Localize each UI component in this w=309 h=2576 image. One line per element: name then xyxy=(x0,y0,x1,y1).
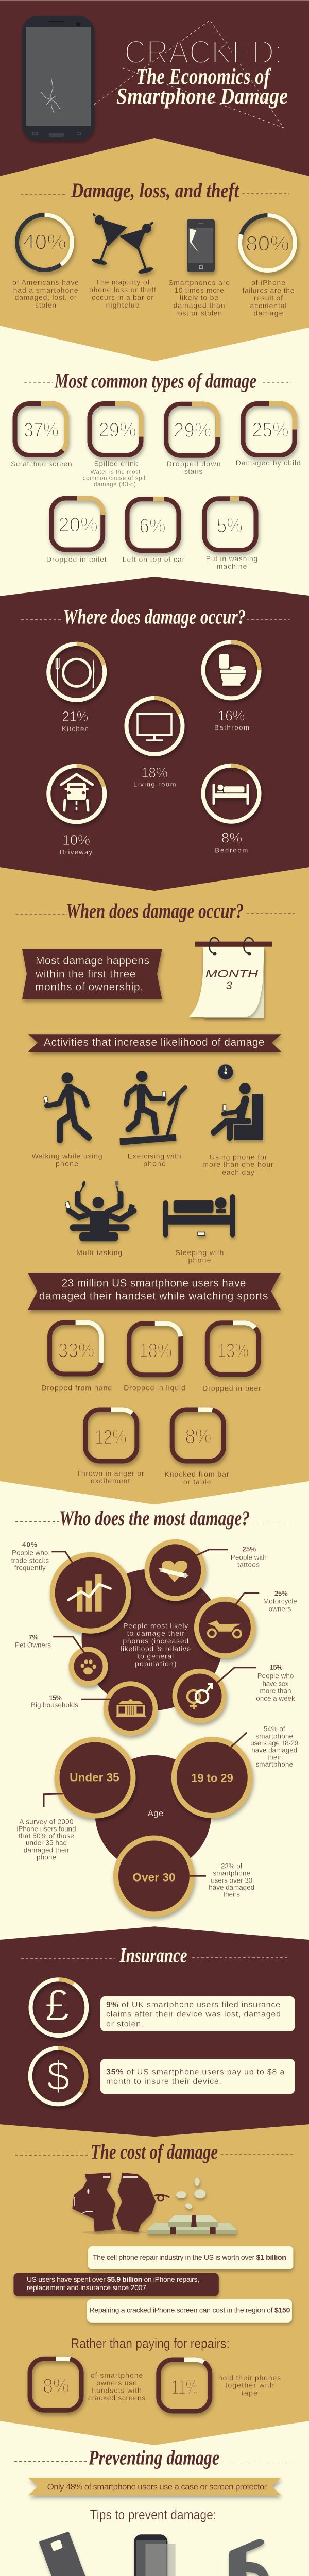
tile: knocked from bar xyxy=(172,1410,224,1461)
text: iPhone failures stat xyxy=(242,279,295,317)
stat: frequent sex: once a week xyxy=(256,1694,295,1702)
labels: activities first row: Exercising with xyxy=(128,1151,181,1160)
stat: motorcycle: owners xyxy=(269,1605,291,1613)
text: survey stat: damaged their xyxy=(24,1846,70,1854)
tile: thrown in anger xyxy=(85,1410,137,1461)
badge: over 30: Over 30 xyxy=(132,1871,176,1884)
icon: screen protector on phone xyxy=(134,2534,176,2576)
panel: header xyxy=(0,0,309,176)
labels: activities first row xyxy=(32,1151,273,1176)
icon: calendar month 3: 3 xyxy=(226,980,232,992)
labels: activities first row: phone xyxy=(143,1159,166,1167)
labels: first row: Damaged by child xyxy=(236,459,301,467)
text: survey stat: iPhone users found xyxy=(16,1825,76,1833)
ring: bedroom xyxy=(203,766,260,822)
callout lines xyxy=(52,1550,259,1699)
text: central likelihood statement: population) xyxy=(135,1659,176,1668)
subheading: tips: Tips to prevent damage: xyxy=(90,2507,216,2522)
stat: pet owners: Pet Owners xyxy=(15,1641,51,1649)
labels: sports second row: Thrown in anger or xyxy=(76,1469,144,1477)
tile: scratched screen xyxy=(15,404,66,455)
stat: frequent sex xyxy=(256,1664,295,1702)
callout: cracked screen cost: Repairing a cracked iPhone screen can cost in the region of $150 xyxy=(89,2306,290,2314)
text: nightclub stat: nightclub xyxy=(106,301,140,309)
text: americans stat: of Americans have xyxy=(12,278,79,286)
ring: kitchen xyxy=(48,644,105,700)
text: over 30 stat: have damaged xyxy=(209,1884,254,1891)
labels: activities first row: more than one hour xyxy=(202,1160,273,1168)
tile: cracked screen users xyxy=(30,2359,81,2410)
badge: tattoos xyxy=(147,1541,203,1598)
labels: sports second row: or table xyxy=(183,1478,211,1486)
labels: first row: Dropped down xyxy=(167,460,220,468)
icon: broken piggy bank xyxy=(72,2173,169,2234)
icon: dripping faucet xyxy=(227,2539,269,2576)
ring: pound: £ xyxy=(45,1981,70,2030)
callout: UK insurance: claims after their device was lost, damaged xyxy=(106,2010,281,2019)
chart: age circles xyxy=(57,1739,250,1914)
ring: 80%: 80% xyxy=(246,232,289,256)
text: central likelihood statement: to damage their xyxy=(127,1629,184,1637)
text: cracked screen users: of smartphone xyxy=(91,2371,143,2379)
tile: dropped in liquid: 18% xyxy=(139,1340,172,1362)
text: over 30 stat: 23% of xyxy=(221,1862,243,1870)
labels: first row: Scratched screen xyxy=(11,460,72,468)
tile: washing machine xyxy=(204,499,256,550)
stat: frequent sex: 15% xyxy=(270,1664,283,1671)
icon: person on treadmill xyxy=(120,1071,185,1145)
text: tape users: together with xyxy=(225,2381,274,2389)
labels: sports second row xyxy=(76,1469,229,1486)
tile: spilled drink: 29% xyxy=(98,419,136,441)
text: ten times stat: 10 times more xyxy=(174,286,224,294)
heading: Damage, loss, and theft xyxy=(71,179,240,202)
labels: second row: Put in washing xyxy=(206,554,258,563)
central circle xyxy=(81,1569,224,1710)
stat: motorcycle: 25% xyxy=(274,1589,288,1597)
stat: big households: 15% xyxy=(49,1694,62,1702)
tile: dropped in toilet xyxy=(52,498,103,550)
badge: stock traders xyxy=(53,1555,129,1631)
labels: activities second row: Multi-tasking xyxy=(76,1248,122,1257)
banner: first three months: within the first three xyxy=(35,968,135,980)
stat: living room: 18% xyxy=(141,765,168,781)
panel: preventing damage xyxy=(14,2446,297,2576)
ring: dollar: $ xyxy=(47,2053,70,2099)
badge: under 35 xyxy=(57,1739,133,1816)
callout: UK insurance: or stolen. xyxy=(106,2020,143,2028)
banner: 23 million xyxy=(28,1273,281,1310)
stat: bedroom: 8% xyxy=(221,830,242,846)
stat: bathroom: 16% xyxy=(218,708,245,724)
text: over 30 stat: theirs xyxy=(223,1891,240,1899)
stat: bedroom xyxy=(215,830,248,854)
banner: activities xyxy=(28,1034,281,1052)
stat: stock traders xyxy=(11,1541,49,1571)
heading: Most common types of damage xyxy=(54,369,256,393)
text: iPhone failures stat: result of xyxy=(254,294,283,302)
tile: dropped down stairs xyxy=(166,404,218,455)
labels: second row: Dropped in toilet xyxy=(46,555,107,564)
text: iPhone failures stat: failures are the xyxy=(242,286,295,294)
stat: kitchen: 21% xyxy=(62,708,88,724)
text: central likelihood statement xyxy=(121,1622,191,1668)
labels: second row xyxy=(46,554,258,570)
title: CRACKED: xyxy=(124,33,283,71)
text: survey stat: that 50% of those xyxy=(19,1832,74,1840)
ring: 80% xyxy=(240,215,295,270)
tile: tape users xyxy=(159,2360,210,2411)
badge: motorcycle owners xyxy=(197,1599,253,1656)
labels: activities first row: Using phone for xyxy=(210,1153,267,1161)
callout: US users spent: replacement and insurance since 2007 xyxy=(27,2283,146,2292)
text: iPhone failures stat: of iPhone xyxy=(251,279,285,287)
callout: repair industry xyxy=(88,2246,294,2269)
text: tape users: tape xyxy=(242,2388,258,2397)
text: 54% age stat: smartphone xyxy=(255,1760,293,1768)
labels: sports first row: Dropped in beer xyxy=(202,1384,261,1392)
stat: stock traders: frequently xyxy=(14,1564,46,1571)
labels: activities first row: each day xyxy=(222,1168,254,1176)
heading: Preventing damage xyxy=(88,2446,219,2469)
icon: bed with sleeper and phone xyxy=(163,1194,235,1238)
panel: who does the most damage xyxy=(11,1506,298,1914)
labels: sports first row xyxy=(41,1383,261,1392)
text: survey stat: under 35 had xyxy=(26,1839,67,1847)
text: central likelihood statement: phones (increased xyxy=(123,1637,188,1645)
text: 54% age stat: users age 18-29 xyxy=(250,1739,298,1747)
tile: left on top of car xyxy=(127,499,179,551)
callout: US users spent: US users have spent over $5.9 billion on iPhone repairs, xyxy=(27,2275,199,2283)
stat: motorcycle: Motorcycle xyxy=(263,1597,297,1605)
ring: living room xyxy=(127,698,182,754)
ring: pound xyxy=(31,1979,87,2036)
text: ten times stat xyxy=(168,278,230,317)
subheading: rather than paying: Rather than paying for repairs: xyxy=(71,2335,230,2351)
text: nightclub stat: The majority of xyxy=(96,278,150,286)
callout: UK insurance xyxy=(100,1996,295,2031)
badge: 19 to 29 xyxy=(174,1739,250,1816)
stat: frequent sex: People who xyxy=(258,1672,294,1680)
labels: sports first row: Dropped in liquid xyxy=(124,1383,185,1392)
panel: the cost of damage xyxy=(0,2124,309,2445)
stat: tattoos: 25% xyxy=(242,1546,256,1553)
text: 54% age stat: smartphone xyxy=(255,1732,293,1740)
stat: driveway xyxy=(60,832,93,856)
panel: most common types of damage xyxy=(11,369,301,570)
tile: dropped in beer xyxy=(207,1323,259,1375)
icon: cracked smartphone xyxy=(22,16,94,141)
tile: dropped down stairs: 29% xyxy=(174,419,211,442)
text: central likelihood statement: likelihood % relative xyxy=(121,1645,191,1653)
labels: activities first row: Walking while using xyxy=(32,1151,102,1160)
stat: bedroom: Bedroom xyxy=(215,846,248,854)
tile: thrown in anger: 12% xyxy=(95,1426,127,1448)
text: cracked screen users: handsets with xyxy=(92,2386,142,2394)
text: ten times stat: likely to be xyxy=(180,294,218,302)
text: 54% age stat: 54% of xyxy=(264,1725,285,1733)
stat: frequent sex: have sex xyxy=(263,1680,289,1687)
stat: stock traders: People who xyxy=(12,1549,48,1556)
title: The Economics of xyxy=(136,64,271,89)
heading: When does damage occur? xyxy=(66,900,244,923)
title xyxy=(116,33,288,109)
icon: calendar month 3 xyxy=(189,938,272,1018)
banner: first three months xyxy=(22,949,162,999)
labels: second row: Left on top of car xyxy=(123,555,185,564)
stat: big households: Big households xyxy=(31,1701,78,1709)
labels: first row: damage (43%) xyxy=(94,482,136,488)
text: survey stat: A survey of 2000 xyxy=(20,1818,73,1826)
stat: kitchen: Kitchen xyxy=(62,725,89,733)
decorative dashed triangle xyxy=(94,20,284,128)
text: tape users: hold their phones xyxy=(218,2374,281,2382)
text: iPhone failures stat: accidental xyxy=(250,301,286,310)
icon: coins and cash stacks xyxy=(147,2178,236,2234)
text: over 30 stat xyxy=(209,1862,254,1899)
banner: 48% use a case xyxy=(28,2478,281,2495)
labels: second row: machine xyxy=(217,562,247,570)
text: 54% age stat xyxy=(250,1725,298,1768)
labels: activities second row: Sleeping with xyxy=(176,1248,224,1257)
text: survey stat: phone xyxy=(37,1853,56,1861)
text: americans stat: had a smartphone xyxy=(13,286,78,294)
stat: big households xyxy=(31,1694,78,1709)
text: tape users xyxy=(218,2374,281,2397)
tile: tape users: 11% xyxy=(171,2377,198,2399)
text: ten times stat: damaged than xyxy=(173,301,225,309)
callout: UK insurance: 9% of UK smartphone users filed insurance xyxy=(106,2001,280,2009)
tile: dropped in toilet: 20% xyxy=(58,514,98,536)
title: Smartphone Damage xyxy=(116,83,288,109)
text: iPhone failures stat: damage xyxy=(253,309,283,317)
text: over 30 stat: smartphone xyxy=(213,1870,250,1877)
tile: dropped in beer: 13% xyxy=(217,1340,249,1362)
labels: first row: Water is the most xyxy=(91,469,141,476)
labels: sports first row: Dropped from hand xyxy=(41,1383,112,1392)
badge: 19 to 29: 19 to 29 xyxy=(191,1771,233,1784)
banner: first three months: months of ownership. xyxy=(35,981,143,993)
badge: under 35: Under 35 xyxy=(70,1771,119,1784)
panel: when does damage occur xyxy=(0,867,309,1504)
tile: dropped in liquid xyxy=(129,1324,181,1375)
heading: Where does damage occur? xyxy=(63,605,246,629)
banner: 48% use a case: Only 48% of smartphone users use a case or screen protector xyxy=(47,2482,267,2492)
heading: The cost of damage xyxy=(91,2140,218,2163)
tile: knocked from bar: 8% xyxy=(185,1426,212,1448)
stat: bathroom xyxy=(214,708,249,732)
callout: cracked screen cost xyxy=(87,2299,292,2323)
text: cracked screen users: cracked screens xyxy=(88,2394,145,2402)
stat: stock traders: trade stocks xyxy=(11,1556,49,1564)
callout: US insurance: month to insure their device. xyxy=(106,2077,221,2086)
stat: driveway: Driveway xyxy=(60,848,93,856)
text: americans stat xyxy=(12,278,79,309)
ring: 40% xyxy=(17,215,72,270)
text: nightclub stat: phone loss or theft xyxy=(89,285,156,294)
text: central likelihood statement: People most likely xyxy=(123,1622,188,1630)
tile: washing machine: 5% xyxy=(217,515,243,537)
stat: living room: Living room xyxy=(133,781,176,788)
badge: pet owners xyxy=(71,1650,105,1684)
tile: dropped from hand: 33% xyxy=(58,1340,94,1362)
stat: stock traders: 40% xyxy=(22,1541,37,1549)
tile: left on top of car: 6% xyxy=(139,515,166,537)
badge: over 30 xyxy=(116,1838,192,1914)
text: 54% age stat: their xyxy=(267,1754,282,1761)
banner: first three months: Most damage happens xyxy=(36,955,149,967)
heading: Insurance xyxy=(119,1943,187,1967)
icon: cracked iPhone xyxy=(187,219,215,272)
tile: damaged by child: 25% xyxy=(252,419,289,441)
tile: damaged by child xyxy=(243,404,295,455)
stat: pet owners xyxy=(15,1634,51,1649)
icon: multi-tasking figure xyxy=(65,1180,135,1241)
callout lines: age xyxy=(44,1733,247,1876)
stat: frequent sex: more than xyxy=(260,1687,291,1695)
icon: clock and seated person xyxy=(214,1064,263,1140)
callout: US users spent xyxy=(13,2273,219,2296)
text: 54% age stat: have damaged xyxy=(251,1747,297,1754)
text: nightclub stat: occurs in a bar or xyxy=(92,293,153,301)
icon: calendar month 3: MONTH xyxy=(205,968,259,980)
badge: big households xyxy=(106,1684,155,1733)
stat: bathroom: Bathroom xyxy=(214,724,249,732)
labels: first row: stairs xyxy=(184,467,202,476)
labels: sports second row: excitement xyxy=(91,1477,130,1485)
panel: damage, loss and theft xyxy=(0,138,309,361)
tile: cracked screen users: 8% xyxy=(43,2375,70,2397)
tile: spilled drink xyxy=(90,404,141,455)
labels: first row xyxy=(11,459,301,488)
callout: repair industry: The cell phone repair industry in the US is worth over $1 billion xyxy=(93,2253,286,2261)
text: over 30 stat: users over 30 xyxy=(211,1876,252,1884)
banner: 23 million: damaged their handset while watching sports xyxy=(39,1291,268,1302)
labels: sports second row: Knocked from bar xyxy=(165,1470,229,1478)
panel: where does damage occur xyxy=(0,577,309,891)
banner: 23 million: 23 million US smartphone users have xyxy=(62,1277,246,1289)
heading: Who does the most damage? xyxy=(59,1506,250,1530)
callout: US insurance xyxy=(100,2059,295,2094)
stat: tattoos xyxy=(231,1546,267,1569)
icon: tipped martini glasses xyxy=(91,214,154,275)
labels: first row: common cause of spill xyxy=(83,476,147,482)
stat: kitchen xyxy=(62,708,89,733)
text: americans stat: stolen xyxy=(35,301,56,309)
banner: activities: Activities that increase likelihood of damage xyxy=(44,1037,265,1048)
stat: tattoos: People with xyxy=(231,1553,267,1561)
ring: driveway xyxy=(48,766,105,822)
labels: activities second row xyxy=(76,1248,224,1264)
tile: dropped from hand xyxy=(50,1323,101,1374)
stat: motorcycle xyxy=(263,1589,297,1613)
icon: protective case xyxy=(40,2533,86,2576)
text: americans stat: damaged, lost, or xyxy=(15,293,77,301)
icon: walking person xyxy=(44,1072,89,1140)
text: cracked screen users: owners use xyxy=(96,2379,137,2387)
text: nightclub stat xyxy=(89,278,156,309)
text: survey stat xyxy=(16,1818,76,1861)
stat: driveway: 10% xyxy=(62,832,90,848)
text: cracked screen users xyxy=(88,2371,145,2402)
text: ten times stat: Smartphones are xyxy=(168,278,230,286)
stat: pet owners: 7% xyxy=(29,1634,38,1641)
tile: scratched screen: 37% xyxy=(24,419,59,441)
text: central likelihood statement: to general xyxy=(138,1652,174,1660)
labels: activities second row: phone xyxy=(188,1256,211,1264)
text: ten times stat: lost or stolen xyxy=(176,309,222,317)
stat: tattoos: tattoos xyxy=(237,1561,260,1569)
ring: bathroom xyxy=(203,642,260,698)
ring: dollar xyxy=(30,2048,86,2104)
labels: activities first row: phone xyxy=(56,1159,78,1167)
panel: insurance xyxy=(0,1926,309,2137)
badge: frequent sex xyxy=(175,1671,224,1721)
stat: living room xyxy=(133,765,176,788)
callout: US insurance: 35% of US smartphone users pay up to $8 a xyxy=(106,2068,284,2077)
labels: first row: Spilled drink xyxy=(94,459,138,467)
chart: age circles: Age xyxy=(148,1808,163,1818)
ring: 40%: 40% xyxy=(23,230,66,253)
